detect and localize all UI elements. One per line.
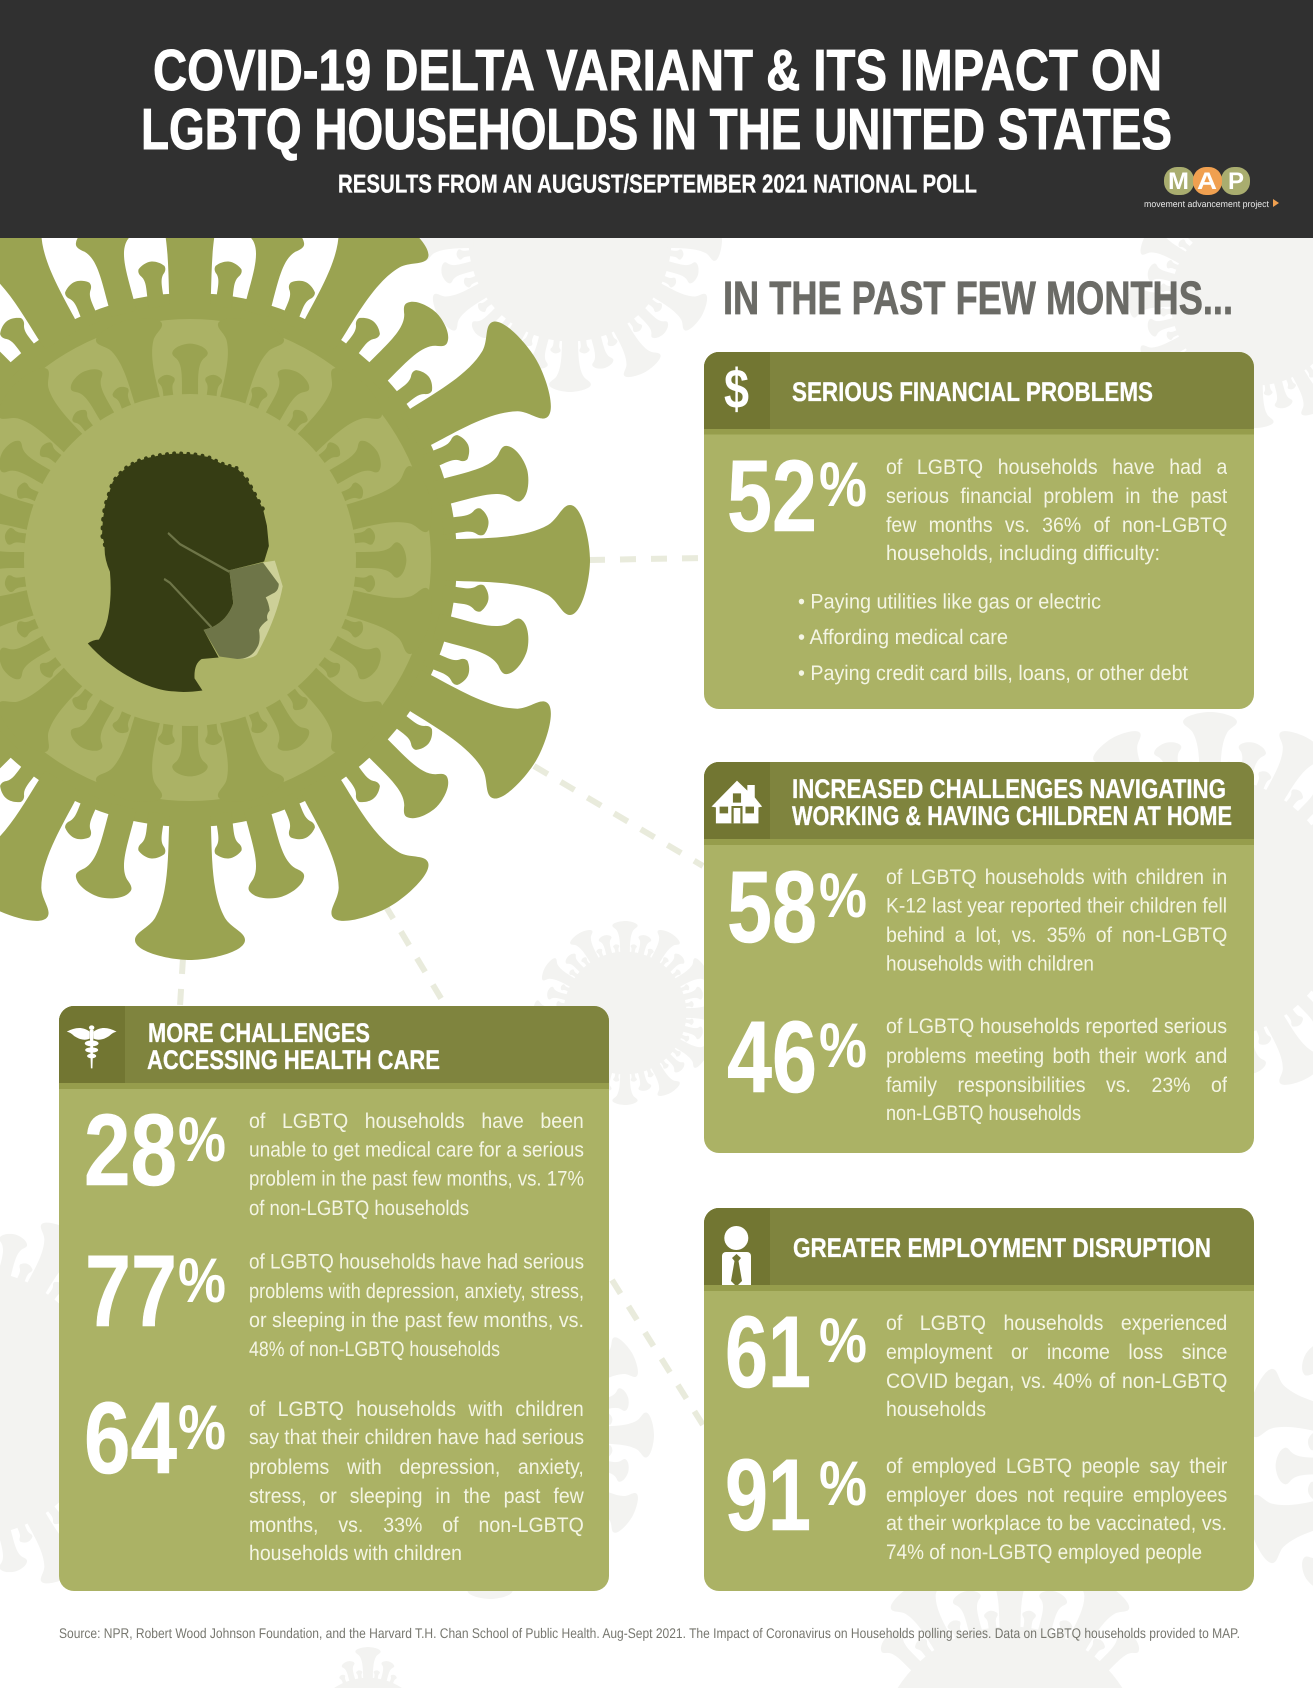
text block: of LGBTQ households have had a [886, 456, 1227, 478]
stat: 58%: 58 [727, 850, 817, 964]
text block: employment or income loss since [886, 1340, 1227, 1364]
stat: 64%: 64 [84, 1381, 177, 1495]
text block: months, vs. 33% of non-LGBTQ [249, 1514, 584, 1536]
panel: more challenges accessing health care [59, 1006, 609, 1591]
dashed connector: health care right [385, 905, 442, 1000]
text block: of LGBTQ households have had serious [249, 1250, 584, 1274]
text block [249, 1395, 584, 1565]
stat: 61%: % [819, 1306, 867, 1376]
panel: greater employment disruption [704, 1208, 1254, 1591]
text block: problem in the past few months, vs. 17% [249, 1168, 584, 1190]
text block: unable to get medical care for a serious [249, 1138, 584, 1162]
panel: serious financial problems [704, 352, 1254, 709]
stat: 28%: 28 [84, 1093, 177, 1207]
dashed connector: children at home [534, 766, 703, 866]
heading: GREATER EMPLOYMENT DISRUPTION [793, 1233, 1211, 1263]
text block: of LGBTQ households experienced [886, 1312, 1227, 1334]
bullet list: • Paying utilities like gas or electric [798, 590, 1101, 614]
text block: problems with depression, anxiety, stress, [249, 1280, 584, 1303]
text block [886, 1015, 1227, 1125]
text block: problems with depression, anxiety, [249, 1456, 584, 1478]
title [141, 38, 1172, 162]
stat: 52%: 52 [727, 439, 817, 553]
text block: households, including difficulty: [886, 542, 1160, 565]
text block: 48% of non-LGBTQ households [249, 1338, 500, 1361]
text block: at their workplace to be vaccinated, vs. [886, 1512, 1227, 1535]
large virus illustration with masked head [0, 150, 600, 970]
dashed connector: employment [612, 1280, 703, 1425]
bullet list [798, 590, 1188, 685]
text block: households with children [249, 1542, 462, 1565]
text block: of LGBTQ households with children in [886, 866, 1227, 889]
stat: 46%: % [819, 1011, 867, 1081]
stat: 58%: % [819, 861, 867, 931]
text block: stress, or sleeping in the past few [249, 1484, 584, 1508]
stat: 28%: % [178, 1105, 226, 1175]
icon: house [711, 781, 762, 823]
heading [147, 1018, 440, 1075]
dashed connector: financial problems [589, 558, 703, 560]
text block: serious financial problem in the past [886, 484, 1227, 508]
text block: few months vs. 36% of non-LGBTQ [886, 514, 1227, 536]
text block [886, 1452, 1227, 1564]
text block: employer does not require employees [886, 1484, 1227, 1506]
text block: of LGBTQ households have been [249, 1110, 584, 1133]
text block: problems meeting both their work and [886, 1044, 1227, 1068]
logo: MAP: A [1197, 168, 1217, 195]
text block: COVID began, vs. 40% of non-LGBTQ [886, 1370, 1227, 1392]
icon: caduceus [67, 1025, 117, 1068]
heading [792, 774, 1232, 831]
icon: person with tie [722, 1226, 751, 1285]
text block [249, 1108, 584, 1220]
text block: say that their children have had serious [249, 1426, 584, 1449]
text block: of employed LGBTQ people say their [886, 1454, 1227, 1478]
heading: INCREASED CHALLENGES NAVIGATING [792, 774, 1226, 804]
heading: SERIOUS FINANCIAL PROBLEMS [792, 377, 1153, 407]
text block: non-LGBTQ households [886, 1102, 1081, 1125]
text block: family responsibilities vs. 23% of [886, 1074, 1227, 1096]
text block [249, 1250, 584, 1361]
stat: 77%: % [178, 1246, 226, 1316]
text block: behind a lot, vs. 35% of non-LGBTQ [886, 924, 1227, 947]
logo: MAP [1144, 167, 1279, 209]
text block: of LGBTQ households reported serious [886, 1015, 1227, 1038]
bullet list: • Paying credit card bills, loans, or other debt [798, 662, 1188, 685]
text block [886, 1309, 1227, 1421]
stat: 46%: 46 [727, 1000, 817, 1114]
logo: MAP: P [1228, 168, 1244, 195]
text block: households [886, 1398, 986, 1421]
stat: 91%: % [819, 1449, 867, 1519]
icon: head silhouette with mask [88, 453, 283, 692]
heading: MORE CHALLENGES [148, 1018, 370, 1048]
text block [886, 453, 1227, 565]
text block: or sleeping in the past few months, vs. [249, 1309, 584, 1332]
text block [886, 864, 1227, 976]
text block: households with children [886, 952, 1094, 976]
heading: ACCESSING HEALTH CARE [147, 1045, 440, 1075]
stat: 91%: 91 [725, 1438, 811, 1552]
text block: 74% of non-LGBTQ employed people [886, 1541, 1202, 1564]
panel: working and having children at home [704, 762, 1254, 1153]
text block: of non-LGBTQ households [249, 1197, 469, 1220]
logo: MAP: M [1168, 168, 1189, 195]
text block: of LGBTQ households with children [249, 1398, 584, 1420]
text block: K-12 last year reported their children fell [886, 894, 1227, 918]
dashed connector: health care left [180, 958, 183, 1006]
stat: 52%: % [819, 450, 867, 520]
stat: 77%: 77 [85, 1234, 177, 1348]
logo: MAP: movement advancement project [1144, 199, 1269, 209]
icon: dollar sign: $ [724, 357, 749, 420]
stat: 61%: 61 [725, 1295, 811, 1409]
stat: 64%: % [178, 1393, 226, 1463]
header band [0, 0, 1313, 238]
bullet list: • Affording medical care [798, 626, 1008, 649]
subtitle: RESULTS FROM AN AUGUST/SEPTEMBER 2021 NATIONAL POLL [338, 168, 977, 198]
